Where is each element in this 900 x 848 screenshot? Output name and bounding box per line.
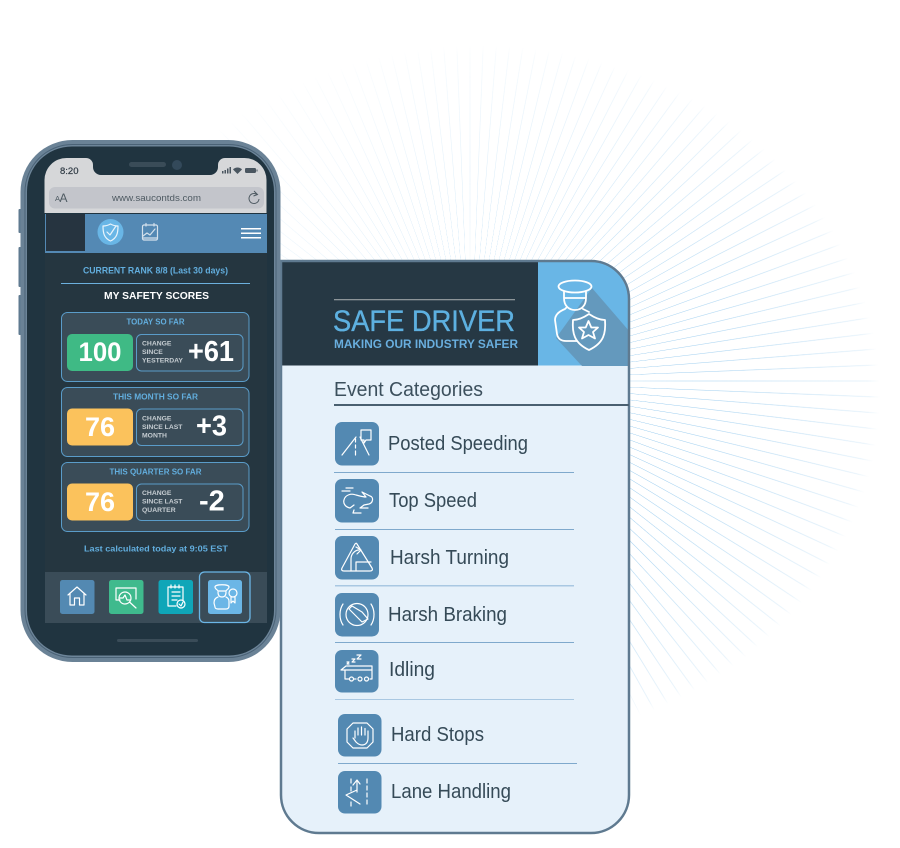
item: hard stops [338, 714, 484, 756]
score card: this month [62, 388, 249, 456]
item: lane handling: Lane Handling [391, 781, 511, 803]
score card: this month: 76 [85, 412, 115, 442]
score card: this quarter: SINCE LAST [142, 498, 183, 506]
item: harsh turning: Harsh Turning [390, 547, 509, 569]
heading: event categories: Event Categories [334, 378, 483, 401]
item: idling: Idling [389, 659, 435, 681]
score card: this month: SINCE LAST [142, 424, 183, 431]
icon: home [60, 580, 94, 614]
last calculated note: Last calculated today at 9:05 EST [84, 544, 229, 554]
browser chrome: A [55, 194, 60, 203]
sunburst rays background [265, 56, 875, 710]
phone frame [20, 140, 280, 662]
icon: calendar chart [142, 224, 158, 240]
heading: my safety scores: MY SAFETY SCORES [104, 290, 209, 302]
rank text: CURRENT RANK 8/8 (Last 30 days) [83, 266, 228, 276]
item: top speed [335, 479, 477, 522]
panel: safe driver event categories [281, 261, 630, 833]
score card: this quarter: THIS QUARTER SO FAR [110, 468, 202, 476]
item: posted speeding [335, 422, 528, 466]
icon: map search [109, 580, 144, 614]
score card: today: TODAY SO FAR [126, 318, 185, 326]
score card: this quarter [62, 462, 249, 532]
bottom navigation bar [45, 572, 267, 623]
score card: this month: +3 [196, 410, 227, 442]
item: lane handling [338, 771, 511, 814]
score card: this month: MONTH [142, 432, 167, 440]
phone mockup [18, 140, 281, 662]
infographic artwork [18, 140, 630, 834]
icon: driver badge selected [200, 572, 250, 622]
icon: checklist [158, 580, 193, 614]
score card: today: YESTERDAY [142, 358, 183, 364]
score card: this quarter: QUARTER [142, 507, 176, 514]
item: harsh turning [335, 536, 509, 580]
status time: 8:20 [60, 166, 78, 177]
item: idling [335, 650, 435, 692]
score card: today: +61 [188, 336, 234, 368]
item: hard stops: Hard Stops [391, 724, 484, 746]
item: harsh braking [335, 593, 507, 636]
icon: shield check [98, 219, 124, 245]
url bar [49, 187, 264, 208]
nav bar [45, 214, 267, 253]
title: safe driver: SAFE DRIVER [333, 305, 515, 338]
reload icon [249, 191, 259, 204]
score card: this quarter: CHANGE [142, 490, 172, 497]
score card: this month: CHANGE [142, 416, 172, 422]
status icons [222, 167, 258, 174]
score card: this quarter: -2 [199, 486, 225, 518]
item: top speed: Top Speed [389, 490, 477, 512]
score card: this month: THIS MONTH SO FAR [113, 392, 198, 402]
icon: hamburger menu [241, 228, 261, 238]
heading rule [334, 404, 629, 406]
home indicator [117, 639, 198, 642]
score card: today: 100 [78, 337, 122, 367]
phone side buttons [18, 209, 281, 335]
header rule [334, 299, 515, 300]
browser chrome [44, 158, 266, 213]
item: posted speeding: Posted Speeding [388, 433, 528, 455]
icon: police driver with shield [555, 280, 605, 350]
score card: today: CHANGE [142, 340, 172, 348]
item: harsh braking: Harsh Braking [388, 604, 507, 626]
panel header band [281, 261, 630, 366]
score card: today: SINCE [142, 349, 163, 356]
score card: this quarter: 76 [85, 487, 115, 517]
score card: today [62, 312, 249, 382]
speaker and camera [129, 162, 166, 167]
subtitle: MAKING OUR INDUSTRY SAFER [334, 337, 518, 351]
browser chrome: A [60, 191, 68, 205]
browser chrome: www.saucontds.com [111, 193, 201, 203]
